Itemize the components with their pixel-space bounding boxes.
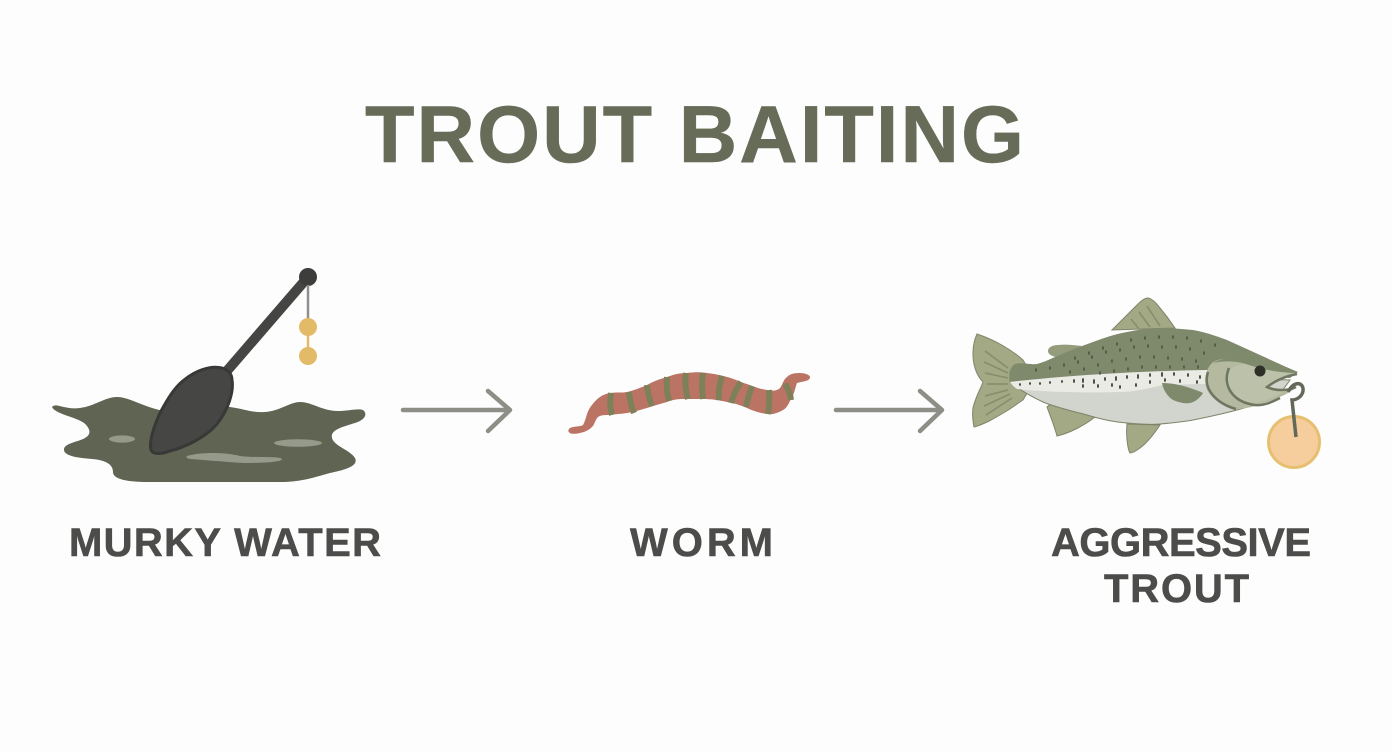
- beads: [299, 318, 317, 336]
- tail rays: [984, 351, 1012, 415]
- label: aggressive trout: AGGRESSIVE: [1051, 521, 1311, 565]
- title: TROUT BAITING: [365, 90, 1024, 180]
- body back: [1009, 328, 1298, 382]
- anal fin: [1047, 402, 1095, 436]
- body belly: [1010, 372, 1290, 424]
- pectoral fin: [1162, 383, 1203, 403]
- line: [307, 285, 309, 320]
- head: [1205, 359, 1297, 409]
- label: aggressive trout: TROUT: [1104, 567, 1249, 611]
- gill lines: [1227, 368, 1280, 405]
- water highlights: [109, 435, 322, 463]
- eye: [1254, 366, 1266, 376]
- mouth: [1267, 374, 1297, 390]
- arrow 2: [836, 391, 942, 431]
- spoon bowl: [150, 367, 232, 454]
- lure disc: [1268, 416, 1320, 468]
- tail fin: [973, 334, 1035, 427]
- label: murky water: MURKY WATER: [69, 521, 381, 565]
- icon: murky water with spoon lure: [52, 268, 365, 482]
- hook: [1288, 384, 1303, 437]
- arrow 1: [403, 391, 510, 431]
- icon: trout with hook: [973, 298, 1320, 468]
- worm bands: [610, 373, 791, 415]
- head top: [1213, 358, 1297, 373]
- label: aggressive trout: [1051, 521, 1311, 611]
- label: worm: WORM: [630, 521, 773, 565]
- dorsal fin: [1112, 298, 1175, 330]
- spoon knob: [299, 268, 317, 286]
- murky water puddle: [52, 397, 365, 482]
- adipose fin: [1048, 345, 1082, 358]
- face lighter: [1226, 364, 1296, 404]
- lateral stripe: [1010, 370, 1208, 392]
- spots on back: [1036, 336, 1215, 374]
- ventral fin: [1127, 424, 1160, 453]
- dorsal rays: [1131, 306, 1160, 329]
- worm body: [568, 372, 810, 434]
- spoon handle: [226, 277, 308, 372]
- icon: worm: [568, 372, 810, 434]
- spots on stripe: [1020, 373, 1200, 388]
